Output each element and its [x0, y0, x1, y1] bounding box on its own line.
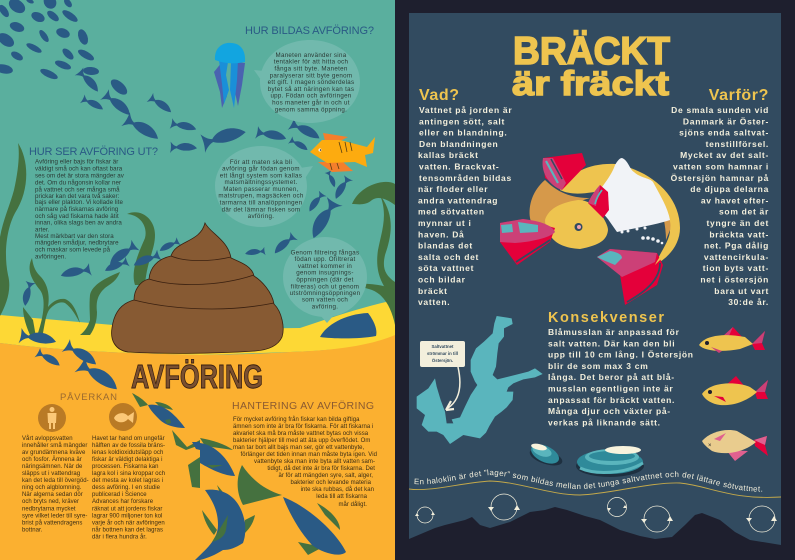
- speech bubble: filtrering: filtreras) och ut genom: [291, 283, 359, 290]
- text: varför: tion byts vatt-: [703, 263, 769, 273]
- icon: fish: [109, 403, 137, 431]
- text: konsekvenser: anpassat för bräckt vatten.: [548, 395, 675, 405]
- speech bubble: fisken: där det lämnar fisken som: [222, 206, 300, 213]
- text: hur ser avföring ut: på vattnet och ser många små: [35, 186, 120, 194]
- icon: circulation arrows: [415, 494, 777, 532]
- speech bubble: filtrering: [283, 237, 367, 323]
- callout: saltvatten: strömmar in till: [427, 351, 458, 356]
- text: varför: bara ut vart: [714, 286, 769, 296]
- text: varför: De smala sunden vid: [671, 105, 769, 115]
- text: varför: de djupa delarna: [690, 184, 769, 194]
- heading: varför: Varför?: [709, 87, 769, 104]
- text: varför: Danmark är Öster-: [683, 116, 769, 126]
- text: vad: bräckt: [418, 286, 448, 296]
- text: påverkan höger: där i flera hundra år.: [92, 534, 147, 540]
- text: hur ser avföring ut: närmare på fiskarnas avföring: [35, 206, 119, 213]
- seaweed: [0, 143, 395, 337]
- text: varför: bräckta vatt-: [709, 229, 769, 239]
- speech bubble: maneten: tentakler för att hitta och: [274, 59, 348, 66]
- heading: hur ser avföring ut: HUR SER AVFÖRING UT?: [29, 146, 158, 158]
- title: är fräckt: är fräckt: [512, 65, 669, 103]
- speech bubble: fisken: [215, 146, 313, 227]
- text: hur ser avföring ut: mängden smådjur, nedbrytare: [35, 240, 119, 247]
- text: vad: vatten.: [418, 297, 450, 307]
- speech bubble: filtrering: avföring.: [312, 304, 338, 311]
- text: hantering högerställd: bakterier och levande materia: [290, 480, 372, 486]
- text: hantering högerställd: vattenbyte ska man inte byta allt vatten sam-: [254, 459, 375, 465]
- speech bubble: filtrering: utströmningsöppningen: [290, 290, 361, 297]
- text: varför: vatten som hamnar i: [673, 162, 769, 172]
- speech bubble: maneten: ett gift. I magen sönderdelas: [268, 79, 354, 86]
- text: konsekvenser: salt vatten. Där kan den bli: [548, 338, 675, 348]
- text: påverkan vänster: bottnar.: [22, 528, 43, 534]
- text: konsekvenser: Många djur och växter på-: [548, 406, 671, 416]
- text: varför: som det är: [719, 207, 769, 217]
- fin: inner: [588, 185, 609, 218]
- text: konsekvenser: långa. Det beror på att blå-: [548, 372, 675, 382]
- text: vad: eller en blandning.: [419, 128, 507, 138]
- heading: hur bildas avföring: HUR BILDAS AVFÖRING?: [245, 25, 374, 37]
- title: avföring: AVFÖRING: [131, 359, 263, 396]
- speech bubble: fisken: matstrupen, magsäcken och: [218, 193, 304, 200]
- text: påverkan höger: processen. Fiskarna kan: [92, 464, 159, 470]
- eye: [574, 223, 582, 231]
- head: [545, 200, 608, 249]
- text: vad: Den blandningen: [419, 139, 498, 149]
- text: hur ser avföring ut: innan, olika slags ben av andra: [35, 220, 122, 227]
- arrow: salt water: [446, 367, 460, 410]
- speech bubble: maneten: upp. Födan och avföringen: [270, 93, 352, 100]
- text: hantering av avföring: bakterier hjälper till med att äta upp överflödet. Om: [233, 438, 370, 444]
- speech bubble: filtrering: vattnet kommer in: [298, 263, 352, 270]
- speech bubble: filtrering: som vatten och: [302, 297, 348, 304]
- salt pile: [590, 158, 670, 244]
- text: vad: tensområden bildas: [419, 173, 512, 183]
- text: varför: Mycket av det salt-: [680, 150, 769, 160]
- text: påverkan vänster: släpps ut i vattendrag: [22, 471, 80, 477]
- text: påverkan vänster: Vårt avloppsvatten: [22, 435, 73, 442]
- text: påverkan vänster: brist på vattendragens: [22, 520, 82, 526]
- illustration: large fish with green fins: [132, 393, 346, 560]
- text: hantering av avföring: ämnen som inte är bra för fiskarna. För att fiskarna i: [233, 424, 373, 430]
- speech bubble: filtrering: Genom filtreing fångas: [291, 249, 359, 256]
- icon: jellyfish: [214, 43, 245, 108]
- text: vad: andra vattendrag: [418, 195, 498, 205]
- text: påverkan vänster: ning och algblomning.: [22, 485, 82, 491]
- speech bubble: fisken: ett långt system som kallas: [220, 172, 302, 179]
- text: vad: haven. Då: [418, 229, 464, 239]
- text: konsekvenser: blir de som max 3 cm: [548, 361, 648, 371]
- text: hantering av avföring: akvariet ska må bra måste vattnet bytas och vissa: [233, 430, 369, 437]
- text: hur ser avföring ut: och maskar som levede på: [35, 246, 111, 253]
- text: hantering högerställd: inte ska rubbas, då det kan: [301, 486, 374, 493]
- speech bubble: fisken: avföring.: [248, 213, 274, 220]
- fin: bottom right: [597, 249, 663, 305]
- text: påverkan vänster: nedbrytarna mycket: [22, 506, 76, 512]
- text: påverkan vänster: näringsämnen. När de: [22, 464, 83, 470]
- callout: saltvatten: [420, 341, 465, 367]
- text: påverkan höger: publicerad i Science: [92, 492, 147, 498]
- text: påverkan höger: lagra kol i sina kroppar och: [92, 471, 165, 477]
- text: påverkan vänster: kan det leda till övergöd-: [22, 478, 89, 484]
- speech bubble: filtrering: öppningen (där det: [296, 277, 354, 284]
- text: hur ser avföring ut: väldigt små och kan oftast bara: [35, 166, 123, 172]
- text: påverkan vänster: syre vilket leder till syre-: [22, 514, 87, 520]
- text: hur ser avföring ut: avföringen.: [35, 254, 66, 261]
- text: påverkan höger: dess avföring. I en studie: [92, 485, 161, 491]
- yellow sand: [0, 300, 395, 355]
- text: påverkan höger: det mesta av kolet lagras i: [92, 478, 163, 484]
- orange seabed: [0, 335, 395, 560]
- icon: fish dead: ×: [708, 443, 712, 449]
- callout: saltvatten: Östersjön.: [432, 358, 453, 363]
- fin: top left: [543, 153, 586, 190]
- speech bubble: maneten: Maneten använder sina: [276, 52, 347, 59]
- text: påverkan höger: Advances har forskare: [92, 499, 154, 505]
- text: vad: antingen sött, salt: [419, 116, 505, 126]
- text: varför: tenstillförsel.: [706, 139, 769, 149]
- silhouette: seabed: [409, 507, 781, 560]
- text: hantering av avföring: För mycket avföring från fiskar kan bilda giftiga: [233, 416, 360, 423]
- text: påverkan höger: räknat ut att jordens fiskar: [92, 506, 162, 512]
- map: östersjön: [417, 316, 543, 444]
- text: varför: net. Pga dålig: [704, 241, 769, 251]
- text: påverkan vänster: och bryts ned, kräver: [22, 499, 79, 505]
- panel: bräckt är fräckt: [408, 13, 781, 545]
- icon: blue rock mussel: [320, 313, 376, 338]
- speech bubble: maneten: fånga sitt byte. Maneten: [274, 66, 348, 73]
- text: hantering högerställd: mår dåligt.: [338, 501, 367, 508]
- text: hantering högerställd: tidigt, då det inte är bra för fiskarna. Det: [267, 465, 375, 472]
- text: påverkan höger: lagrar 900 miljoner ton kol: [92, 514, 162, 520]
- icon: fish tired: [702, 376, 768, 405]
- text: påverkan höger: når bottnen kan det lagras: [92, 526, 163, 534]
- text: hantering av avföring: man tar bort allt bajs man ser, gör ett vattenbyte,: [233, 445, 365, 451]
- text: hur ser avföring ut: arter.: [35, 226, 50, 233]
- path: halocline text baseline: [414, 475, 781, 492]
- speech bubble: fisken: tarmarna till analöppningen: [220, 199, 303, 206]
- text: vad: kallas bräckt: [418, 150, 479, 160]
- speech bubble: fisken: Maten passerar munnen,: [223, 186, 299, 193]
- text: vad: med sötvatten: [418, 207, 485, 217]
- text: varför: sjöns enda saltvat-: [679, 128, 769, 138]
- callout: saltvatten: Saltvattnet: [432, 344, 454, 349]
- speech bubble: filtrering: födan upp. Ofiltrerat: [294, 256, 356, 263]
- illustration: fish with salt pile: [500, 153, 680, 305]
- icon: fish healthy: [699, 327, 765, 353]
- illustration: poop: [112, 223, 283, 353]
- text: varför: net i östersjön: [700, 274, 769, 284]
- panel: avföring: [0, 0, 395, 560]
- heading: hantering av avföring: HANTERING AV AVFÖRING: [232, 400, 374, 412]
- title: bräckt: BRÄCKT: [513, 30, 670, 73]
- text: påverkan höger: varje år och när avföringen: [92, 520, 165, 526]
- heading: konsekvenser: Konsekvenser: [548, 310, 664, 326]
- text: vad: blandas det: [418, 241, 473, 251]
- text: vad: när floder eller: [418, 184, 488, 194]
- text: hur ser avföring ut: prickar kan det vara två saker:: [35, 193, 120, 200]
- text: konsekvenser: upp till 10 cm lång. I Östersjön: [548, 350, 694, 360]
- heading: påverkan: PÅVERKAN: [60, 392, 117, 403]
- speech bubble: maneten: bytet så att näringen kan tas: [268, 86, 354, 93]
- text: påverkan höger: lenas koldioxidutsläpp och: [92, 450, 163, 456]
- text: varför: av havet efter-: [701, 195, 769, 205]
- text: hur ser avföring ut: bajs eller plakton. Vi kollade lite: [35, 199, 123, 206]
- text: konsekvenser: Blåmusslan är anpassad för: [548, 327, 680, 337]
- text: hantering högerställd: är för att mängden syre, salt, alger,: [278, 473, 373, 479]
- text: hur ser avföring ut: Mest märkbart var den stora: [35, 233, 114, 240]
- text: varför: 30:de år.: [728, 297, 769, 307]
- line: halocline: [409, 481, 781, 497]
- icon: goldfish: [310, 133, 375, 172]
- text: vad: salta och det: [418, 252, 479, 262]
- text: hur ser avföring ut: och såg vad fiskarna hade ätit: [35, 213, 119, 220]
- text: varför: vattencirkula-: [704, 252, 769, 262]
- text: konsekvenser: musslan egentligen inte är: [548, 384, 673, 394]
- speech bubble: filtrering: genom insugnings-: [296, 270, 354, 277]
- school of fish: [0, 0, 353, 396]
- text: vad: söta vattnet: [418, 263, 474, 273]
- speech bubble: fisken: För att maten ska bli: [230, 159, 292, 166]
- text: vad: vatten. Brackvat-: [419, 162, 499, 172]
- speech bubble: fisken: matsmältningssystemet.: [225, 179, 297, 186]
- text: påverkan höger: hälften av de fossila bräns-: [92, 443, 165, 449]
- text: konsekvenser: verkas på liknande sätt.: [548, 417, 661, 427]
- text: vad: mynnar ut i: [418, 218, 472, 228]
- sea background: [0, 0, 395, 560]
- text: hantering högerställd: förlänger det tiden innan man måste byta igen. Vid: [241, 451, 377, 458]
- text: påverkan vänster: innehåller små mängder: [22, 442, 87, 449]
- text: varför: Östersjön hamnar på: [671, 173, 769, 183]
- text: påverkan vänster: av grundämnena kväve: [22, 450, 86, 456]
- panel background: [409, 13, 781, 548]
- speech bubble: fisken: avföring går födan genom: [222, 165, 300, 172]
- speech bubble: maneten: paralyserar sitt byte genom: [270, 72, 352, 79]
- heading: vad: Vad?: [419, 87, 460, 104]
- text: påverkan vänster: När algerna sedan dör: [22, 492, 83, 498]
- text: påverkan höger: fiskar är väldigt delaktiga i: [92, 457, 162, 463]
- text: vad: och bildar: [418, 274, 466, 284]
- text: haloklin: En haloklin är det ”lager” som bildas mellan det tunga saltvattnet och det lättare sötvattnet.: [414, 469, 762, 492]
- icon: person: [38, 404, 66, 432]
- icon: large mussel: [576, 446, 644, 477]
- speech bubble: maneten: [254, 40, 360, 123]
- speech bubble: maneten: genom samma öppning.: [275, 106, 347, 113]
- text: hur ser avföring ut: Avföring eller bajs för fiskar är: [35, 159, 118, 166]
- text: påverkan höger: Havet tar hand om ungefär: [92, 436, 165, 442]
- text: vad: Vattnet på jorden är: [419, 105, 512, 115]
- text: hur ser avföring ut: det. Om du någonsin kollar ner: [35, 180, 121, 186]
- body: back arc: [560, 164, 680, 265]
- icon: small mussel: [528, 440, 564, 469]
- fin: left: [500, 219, 555, 265]
- text: hantering högerställd: leda till att fiskarna: [316, 494, 368, 500]
- icon: fish dead: [702, 430, 768, 461]
- text: påverkan vänster: och fosfor. Ämnena är: [22, 456, 82, 463]
- text: hur ser avföring ut: ses om det är stora mängder av: [35, 172, 125, 180]
- speech bubble: maneten: hos maneter går in och ut: [272, 100, 350, 107]
- text: varför: tyngre än det: [707, 218, 769, 228]
